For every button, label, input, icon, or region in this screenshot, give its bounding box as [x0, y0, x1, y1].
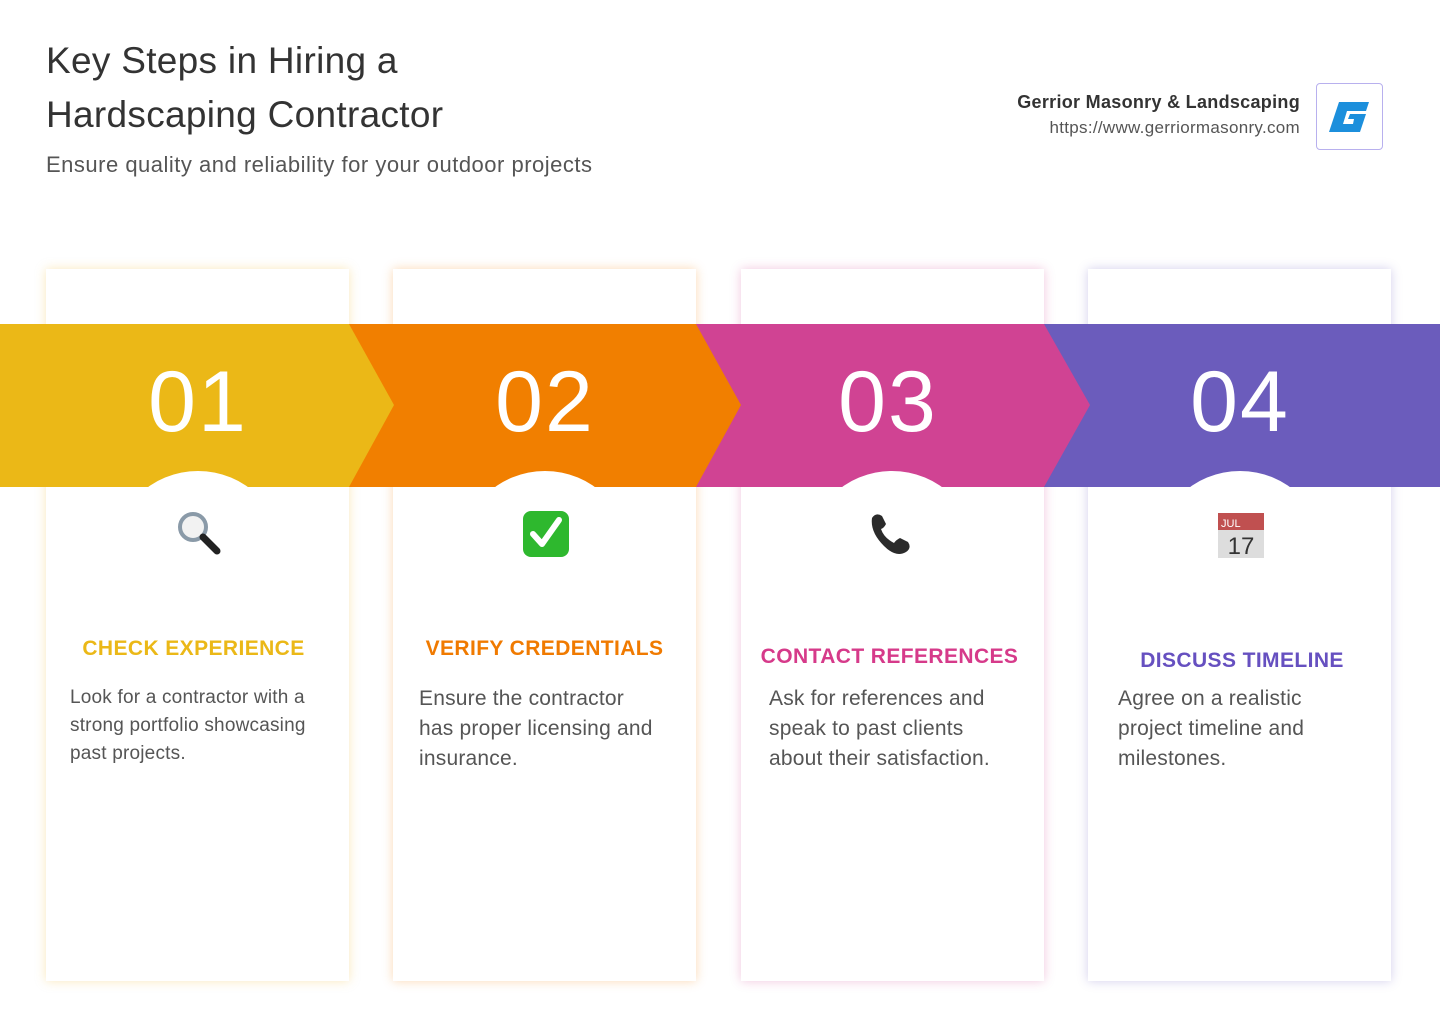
- number 01: 01: [148, 354, 248, 450]
- step 1 text: Look for a contractor with a strong portfolio showcasing past projects.: [70, 687, 306, 764]
- step 4 text: Agree on a realistic project timeline and milestones.: [1118, 687, 1304, 770]
- number 04: 04: [1190, 354, 1290, 450]
- title: Key Steps in Hiring a: [46, 40, 398, 81]
- logo: [1316, 83, 1383, 150]
- subtitle: Ensure quality and reliability for your outdoor projects: [46, 152, 592, 177]
- title: [46, 40, 443, 135]
- number 03: 03: [838, 354, 938, 450]
- brand text: [1017, 92, 1300, 137]
- icon: calendar: [1218, 513, 1264, 559]
- card 4: [1088, 269, 1391, 981]
- step 2 title: VERIFY CREDENTIALS: [426, 637, 663, 660]
- step 3 title: CONTACT REFERENCES: [761, 645, 1018, 668]
- card 3: [741, 269, 1044, 981]
- step 4 title: DISCUSS TIMELINE: [1140, 649, 1344, 672]
- icon: phone: [872, 514, 910, 554]
- title: Hardscaping Contractor: [46, 94, 443, 135]
- icon: check: [523, 511, 569, 557]
- card 2: [393, 269, 696, 981]
- icon: calendar: JUL: [1221, 518, 1241, 530]
- brand text: https://www.gerriormasonry.com: [1049, 118, 1300, 137]
- step 2 text: Ensure the contractor has proper licensing and insurance.: [419, 687, 653, 770]
- card 1: [46, 269, 349, 981]
- brand text: Gerrior Masonry & Landscaping: [1017, 92, 1300, 112]
- step 3 text: Ask for references and speak to past clients about their satisfaction.: [769, 687, 990, 770]
- number 02: 02: [495, 354, 595, 450]
- step 1 title: CHECK EXPERIENCE: [82, 637, 305, 660]
- icon: magnifier: [178, 512, 220, 554]
